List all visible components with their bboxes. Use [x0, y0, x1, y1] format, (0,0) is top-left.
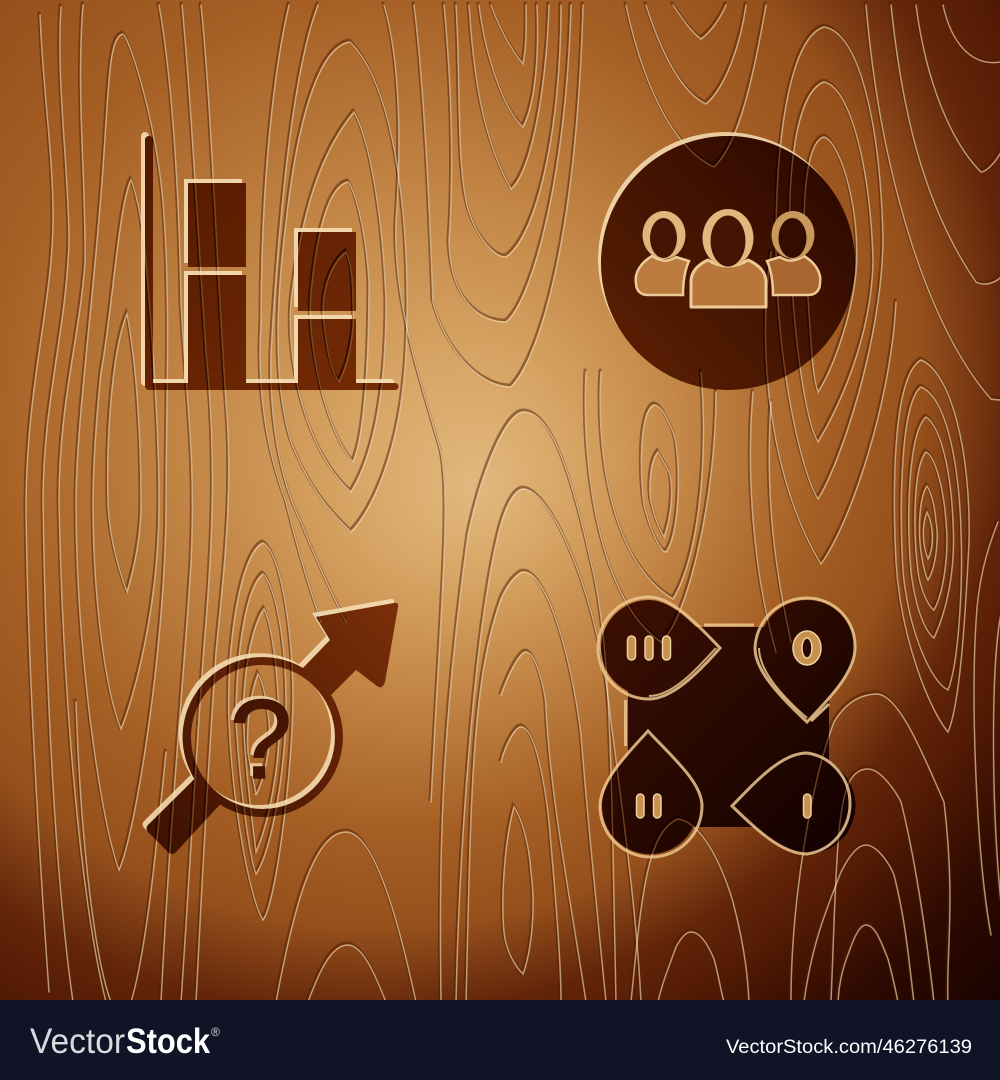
image id url: VectorStock.com/46276139 — [726, 1036, 972, 1058]
icon: circle behind group of people — [598, 132, 855, 390]
icon: square with four pins — [601, 600, 856, 854]
footer bar — [0, 1000, 1000, 1080]
logo: VectorStock: Stock — [126, 1022, 210, 1061]
logo: VectorStock — [30, 1022, 220, 1061]
question mark: ? — [230, 677, 292, 802]
left person — [636, 211, 689, 295]
pin outlines — [598, 597, 855, 857]
right person — [767, 211, 820, 295]
icon: magnifier arrow — [142, 599, 398, 854]
people figures — [636, 209, 820, 307]
logo: VectorStock: ® — [211, 1025, 220, 1039]
logo: VectorStock: Vector — [30, 1022, 125, 1061]
center person — [691, 209, 766, 307]
icon: bar chart — [141, 132, 398, 390]
pin marks — [628, 631, 821, 818]
